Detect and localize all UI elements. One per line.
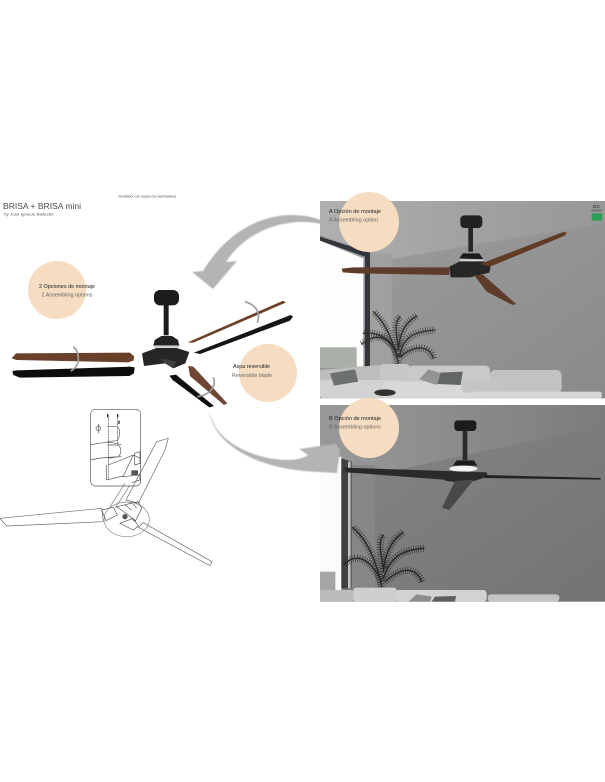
circle: reversible blade: Aspa reversible [233,364,270,370]
fan [342,215,567,305]
circle: A option label [329,192,399,252]
circle: 2 assembling options: 2 Opciones de montaje [39,284,95,290]
title: BRISA + BRISA mini: BRISA + BRISA mini [3,201,81,211]
title: BRISA + BRISA mini [3,201,81,216]
line drawing: assembly diagram [0,409,212,566]
fan [343,420,601,510]
circle: reversible blade: Reversible blade [232,373,272,379]
circle: A option label: A Assembling option [329,218,378,224]
black blade lower right [169,375,214,407]
arrow: lower grey curved [209,410,340,473]
window [320,457,341,590]
blades [0,508,103,526]
plant [343,527,424,587]
caption: top note: Ventilador con aspas (no wall blades) [118,194,176,198]
sofa [320,588,559,602]
ceiling [320,405,605,475]
central fan product and blades [12,290,293,407]
brown blade upper right [188,301,286,343]
circle: B option label [329,398,399,458]
hub [104,502,149,537]
brown blade left [12,353,134,362]
circle: 2 assembling options: 2 Assembling options [42,292,93,298]
inset box [91,409,141,486]
circle: 2 assembling options [28,261,95,319]
panel: photo B mounting option [320,405,605,602]
badge: DC motor [591,204,602,221]
badge: DC motor: DC [593,204,600,210]
circle: B option label: B Opción de montaje [329,416,381,422]
badge: DC motor: MOTOR [591,208,601,212]
black blade upper right [194,315,293,354]
small flip arrows [71,302,258,397]
sofa [320,364,602,398]
circle: reversible blade [232,344,297,402]
window [320,241,363,367]
canopy and motor [142,290,189,368]
plant [362,312,435,363]
black blade left [12,367,135,378]
arrow: upper grey curved [192,215,321,289]
circle: A option label: A Opción de montaje [329,209,381,215]
ceiling [320,201,605,259]
circle: B option label: B Assembling options [329,424,381,430]
title: BRISA + BRISA mini: by José Ignacio Ballester [4,212,55,216]
brown blade lower right [188,366,227,405]
panel: photo A mounting option [320,201,605,398]
